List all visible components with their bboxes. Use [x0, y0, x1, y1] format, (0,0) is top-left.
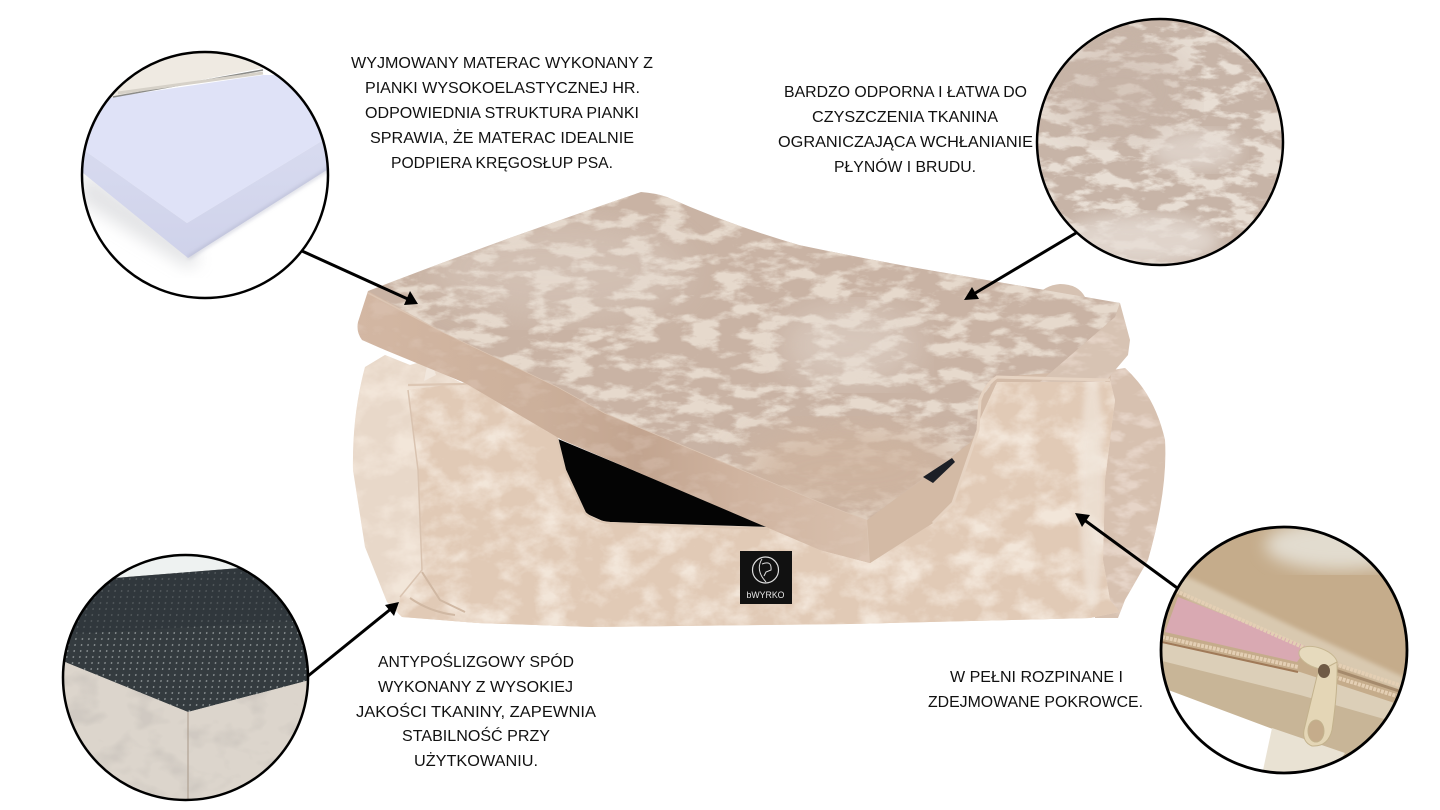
text: removable covers description: ZDEJMOWANE POKROWCE.	[928, 694, 1143, 711]
text: anti-slip description: ANTYPOŚLIZGOWY SPÓD	[378, 653, 574, 671]
bed: right bolster piping	[933, 377, 1110, 523]
bed: bolster piping	[408, 377, 769, 529]
cushion: top face	[360, 185, 1140, 530]
text: fabric description: BARDZO ODPORNA I ŁATWA DO	[784, 84, 1027, 101]
logo label: bWYRKO	[746, 590, 784, 600]
text: removable mattress description	[351, 55, 653, 172]
text: removable mattress description: PODPIERA KRĘGOSŁUP PSA.	[391, 155, 613, 172]
text: fabric description: OGRANICZAJĄCA WCHŁANIANIE	[778, 134, 1033, 151]
circle: velvet fabric	[1035, 17, 1285, 267]
text: anti-slip description: JAKOŚCI TKANINY, ZAPEWNIA	[356, 703, 597, 721]
circle: zipper	[1160, 526, 1408, 774]
text: removable mattress description: WYJMOWANY MATERAC WYKONANY Z	[351, 55, 653, 72]
bed: main body	[350, 350, 1125, 635]
text: fabric description	[778, 84, 1033, 176]
arrow: mattress	[302, 251, 418, 305]
text: removable covers description	[928, 669, 1143, 711]
text: removable mattress description: PIANKI WYSOKOELASTYCZNEJ HR.	[365, 80, 640, 97]
cushion: side seam	[368, 293, 870, 563]
text: anti-slip description: STABILNOŚĆ PRZY	[402, 727, 550, 745]
text: anti-slip description	[356, 653, 597, 770]
cushion: small black tag	[923, 458, 955, 483]
zipper pull	[1298, 646, 1338, 669]
text: removable mattress description: SPRAWIA, ŻE MATERAC IDEALNIE	[370, 129, 634, 147]
cushion: right front face	[867, 430, 978, 563]
bed: far handle	[1034, 284, 1085, 302]
zipper teeth	[1176, 591, 1305, 648]
cushion: backing	[368, 291, 1120, 563]
bed: black interior	[558, 439, 770, 527]
text: removable covers description: W PEŁNI ROZPINANE I	[950, 669, 1123, 686]
circle: anti-slip underside	[60, 553, 310, 805]
bed: corner tab	[424, 360, 436, 381]
text: removable mattress description: ODPOWIEDNIA STRUKTURA PIANKI	[365, 105, 639, 122]
text: anti-slip description: WYKONANY Z WYSOKIEJ	[378, 679, 573, 696]
text: fabric description: CZYSZCZENIA TKANINA	[812, 109, 999, 126]
circle: foam mattress	[75, 50, 335, 300]
text: anti-slip description: UŻYTKOWANIU.	[414, 752, 538, 770]
logo label	[740, 551, 792, 604]
arrow: fabric	[964, 233, 1076, 300]
arrow: anti-slip bottom	[308, 602, 399, 676]
cushion: left side face	[350, 285, 880, 570]
bed: right side panel	[1095, 368, 1166, 618]
dog bed product photo	[350, 185, 1175, 635]
arrow: zipper cover	[1075, 513, 1180, 590]
bed: front panel	[395, 370, 1125, 635]
cushion: back right side face	[1040, 303, 1130, 382]
text: fabric description: PŁYNÓW I BRUDU.	[834, 159, 976, 176]
